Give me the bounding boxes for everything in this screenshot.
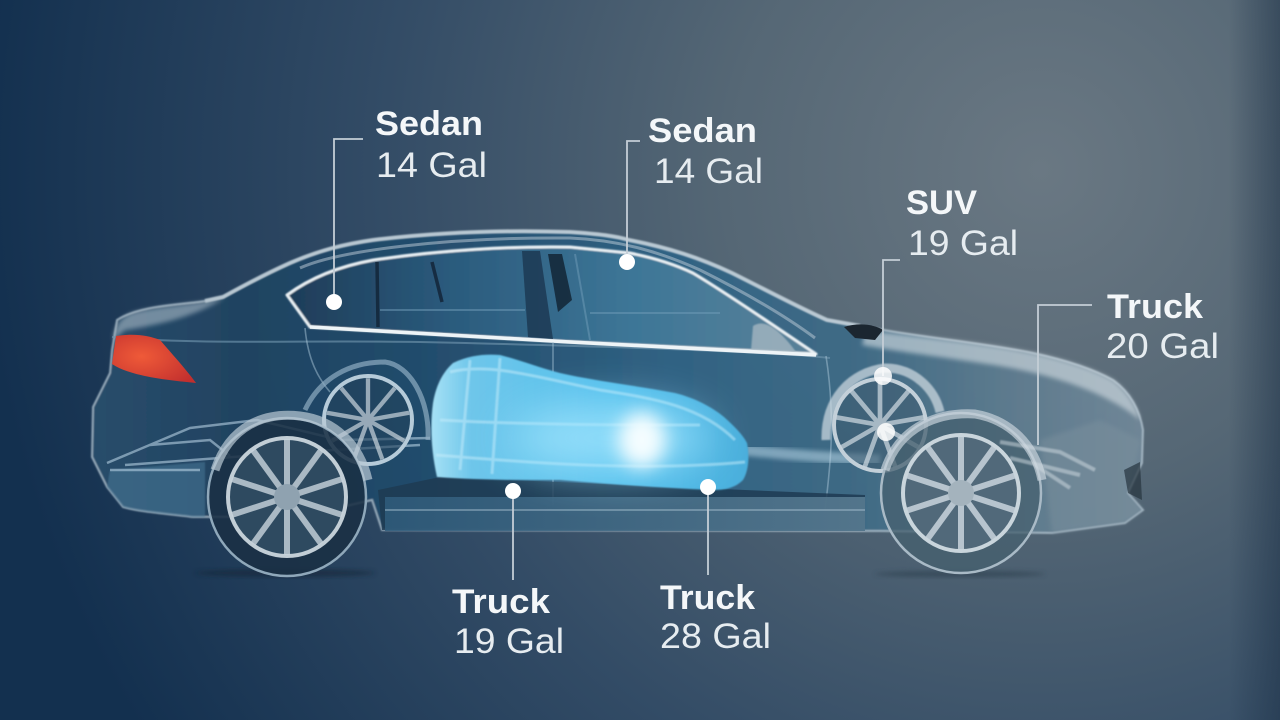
callout: Truck 19 Gal xyxy=(452,483,564,661)
callout: SUV 19 Gal: SUV xyxy=(906,184,977,222)
callout: Truck 20 Gal front: 20 Gal xyxy=(1106,327,1219,366)
callout: Sedan 14 Gal front window xyxy=(619,112,763,270)
callout: Truck 28 Gal bottom: Truck xyxy=(660,579,755,617)
door lines xyxy=(305,328,831,510)
car illustration xyxy=(92,231,1143,577)
callout: Sedan 14 Gal rear window: 14 Gal xyxy=(376,146,487,185)
callout: Truck 28 Gal bottom: 28 Gal xyxy=(660,617,771,656)
centre pillar xyxy=(522,251,553,339)
rear far wheel xyxy=(305,362,428,464)
wiper xyxy=(844,324,883,340)
rear bumper band xyxy=(107,462,205,517)
callout: SUV 19 Gal xyxy=(874,184,1018,441)
second roof line xyxy=(300,238,815,338)
car body xyxy=(92,231,1143,533)
white belt line xyxy=(310,327,816,355)
rear frame lines xyxy=(107,420,430,470)
side sill xyxy=(378,477,865,531)
tail light xyxy=(112,335,196,383)
callout: Truck 20 Gal front: Truck xyxy=(1107,288,1203,326)
callout: Sedan 14 Gal rear window xyxy=(326,105,487,310)
front chassis streaks xyxy=(1000,442,1095,488)
callout: Sedan 14 Gal front window: 14 Gal xyxy=(654,152,763,191)
front far wheel xyxy=(826,368,940,471)
window pillars xyxy=(377,262,442,327)
hood highlight xyxy=(862,330,1140,420)
trunk highlight xyxy=(113,297,225,340)
ground shadow xyxy=(195,569,1045,577)
mirror xyxy=(751,324,796,352)
callout: Sedan 14 Gal rear window: Sedan xyxy=(375,105,483,143)
callout: Truck 20 Gal front xyxy=(1038,288,1219,445)
bumper intake xyxy=(1124,462,1142,500)
body crease xyxy=(112,337,830,358)
callout: Sedan 14 Gal front window: Sedan xyxy=(648,112,757,150)
front fender shade xyxy=(1040,420,1143,533)
callout: Truck 19 Gal: Truck xyxy=(452,583,550,621)
callout: Truck 19 Gal: 19 Gal xyxy=(454,622,564,661)
roof highlight xyxy=(205,231,860,326)
fuel tank xyxy=(431,355,748,490)
front near wheel xyxy=(881,413,1042,573)
callout: SUV 19 Gal: 19 Gal xyxy=(908,224,1018,263)
callout: Truck 28 Gal bottom xyxy=(660,479,771,656)
fuel line front xyxy=(745,450,880,460)
interior bands xyxy=(380,254,720,340)
seat silhouette xyxy=(548,254,572,312)
rear near wheel xyxy=(208,415,368,576)
side windows xyxy=(287,247,816,354)
